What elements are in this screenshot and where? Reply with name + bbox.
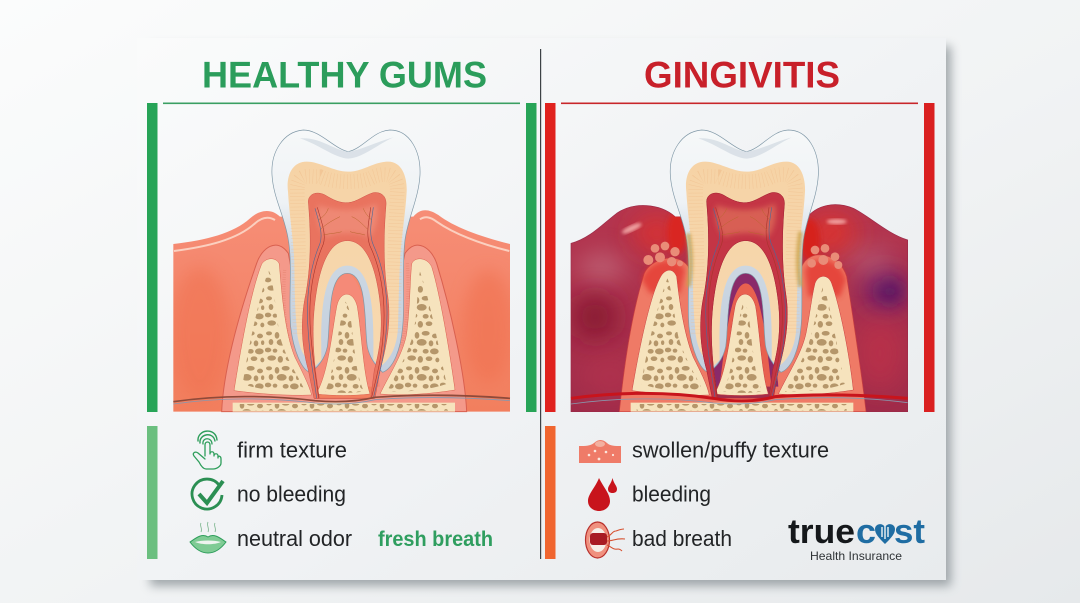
logo word: st: st [894, 513, 925, 551]
icon: pressing finger [193, 431, 221, 469]
centre divider [540, 49, 541, 559]
logo word: cost: c [856, 513, 876, 551]
icon: check mark [192, 479, 223, 509]
logo heart with figures [875, 524, 895, 544]
logo word: true: true [788, 513, 855, 551]
label: firm texture: firm texture [237, 438, 347, 462]
light green list bar [147, 426, 158, 559]
orange list bar [545, 426, 556, 559]
right red bar [924, 103, 934, 412]
feature: firm texture [193, 431, 347, 469]
card shadow [150, 46, 951, 586]
label: swollen/puffy texture: swollen/puffy texture [632, 438, 829, 462]
panel: healthy gums [147, 54, 536, 559]
heading: healthy gums: HEALTHY GUMS [202, 54, 487, 96]
label: bleeding: bleeding [632, 482, 711, 506]
feature: bad breath [586, 522, 732, 558]
icon: blood drops [588, 478, 617, 511]
panel: gingivitis [545, 54, 934, 563]
logo: truecost health insurance [788, 513, 925, 563]
heading: gingivitis: GINGIVITIS [644, 54, 840, 96]
label: no bleeding: no bleeding [237, 482, 346, 506]
icon: open mouth with odor waves [586, 522, 625, 558]
illustration: healthy tooth and gums [170, 130, 513, 412]
feature: swollen texture [579, 438, 829, 463]
label: bad breath: bad breath [632, 526, 732, 551]
right green bar [526, 103, 536, 412]
feature: no bleeding [192, 479, 346, 509]
left red bar [545, 103, 556, 412]
illustration: inflamed tooth and gums [571, 130, 910, 412]
label: fresh breath: fresh breath [378, 528, 493, 551]
feature: bleeding [588, 478, 711, 511]
heading underline [163, 102, 520, 104]
icon: lips with fresh air [190, 522, 226, 553]
card [137, 38, 946, 580]
logo tagline: Health Insurance [810, 549, 902, 563]
label: neutral odor: neutral odor [237, 526, 352, 551]
left green bar [147, 103, 158, 412]
icon: swollen gum [579, 440, 621, 463]
heading underline [561, 102, 918, 104]
feature: neutral odor [190, 522, 493, 553]
